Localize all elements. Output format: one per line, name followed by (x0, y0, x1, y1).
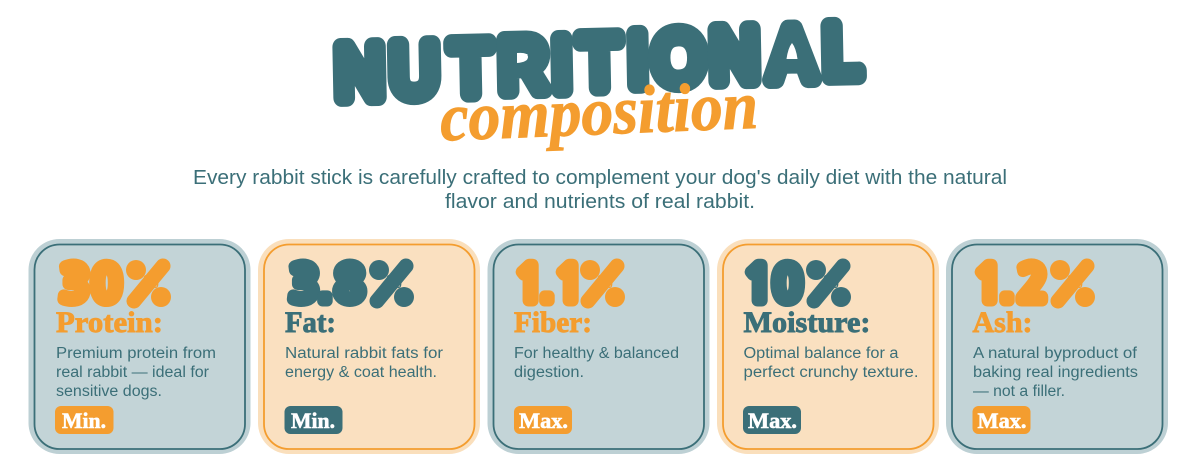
description: protein: real rabbit — ideal for (56, 364, 209, 381)
value: 3.8%: 8 (335, 262, 364, 309)
panel: ash (946, 239, 1168, 454)
value: 1.1%: . (540, 259, 554, 312)
intro text: flavor and nutrients of real rabbit. (445, 191, 755, 213)
value: 1.1%: % (597, 272, 613, 292)
description: fat: energy & coat health. (285, 364, 437, 381)
value: 30%: 30 (60, 262, 121, 309)
value: 30% (60, 260, 171, 309)
description: fiber: For healthy & balanced (514, 345, 679, 362)
value: 10%: 10 (744, 262, 802, 309)
description: moisture: Optimal balance for a (744, 345, 899, 362)
label: protein: Protein: (56, 306, 163, 339)
value: 3.8%: 3 (290, 262, 319, 309)
badge: max: Max. (978, 408, 1026, 433)
badge: max: Max. (748, 408, 797, 433)
intro text: Every rabbit stick is carefully crafted to complement your dog's daily diet with the natural (193, 167, 1007, 189)
description: ash (973, 345, 1138, 400)
description: ash: baking real ingredients (973, 364, 1138, 381)
description: fat (285, 345, 443, 381)
panel: fat (258, 239, 480, 454)
value: 10% (744, 260, 851, 309)
value: 3.8% (290, 259, 414, 312)
panel: moisture (717, 239, 939, 454)
description: fat: Natural rabbit fats for (285, 345, 443, 362)
value: 1.1%: 1 (555, 262, 584, 309)
label: ash: Ash: (972, 306, 1032, 339)
label: moisture: Moisture: (744, 306, 870, 339)
title: NUTRITIONAL: NUTRITIONAL (335, 9, 861, 114)
description: protein: sensitive dogs. (56, 383, 162, 400)
badge: min: Min. (291, 408, 335, 433)
value: 1.1%: 1 (515, 262, 544, 309)
badge: min (55, 406, 114, 434)
value: 30%: % (143, 272, 159, 292)
description: moisture (744, 345, 918, 381)
description: protein (56, 345, 216, 400)
value: 1.2%: 2 (1018, 262, 1047, 309)
description: fiber (514, 345, 679, 381)
description: protein: Premium protein from (56, 345, 216, 362)
label: fat: Fat: (285, 306, 336, 339)
description: moisture: perfect crunchy texture. (744, 364, 918, 381)
value: 1.2%: . (1000, 259, 1014, 312)
value: 10%: % (823, 272, 839, 292)
badge: min (284, 406, 342, 434)
value: 1.2%: 1 (974, 262, 1003, 309)
description: fiber: digestion. (514, 364, 584, 381)
description: ash: — not a filler. (973, 383, 1065, 400)
badge: min: Min. (62, 408, 106, 433)
label: fiber: Fiber: (514, 306, 592, 339)
intro text (193, 167, 1007, 213)
description: ash: A natural byproduct of (973, 345, 1138, 362)
value: 3.8%: . (318, 259, 332, 312)
subtitle word: composition: composition (439, 67, 759, 155)
value: 3.8%: % (386, 272, 402, 292)
panel: fiber (488, 239, 710, 454)
value: 1.1% (515, 259, 625, 312)
value: 1.2%: % (1067, 272, 1083, 292)
value: 1.2% (974, 259, 1095, 312)
panel: protein (28, 239, 250, 454)
badge: max: Max. (519, 408, 568, 433)
